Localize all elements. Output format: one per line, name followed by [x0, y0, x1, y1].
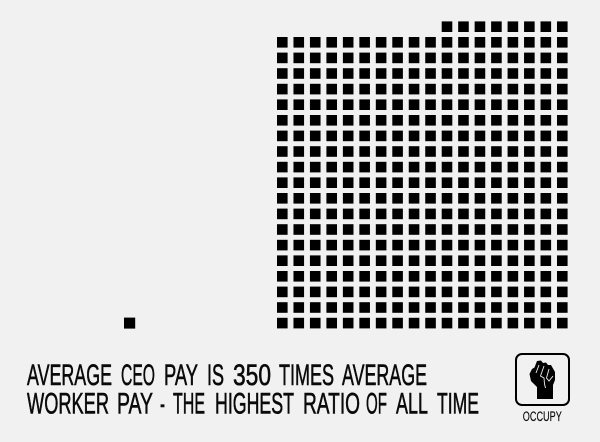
headline: -: [160, 388, 165, 421]
headline: [27, 359, 479, 421]
headline: WORKER: [27, 388, 109, 421]
headline: ALL: [396, 388, 428, 421]
headline: OF: [366, 388, 387, 421]
headline: 350: [233, 359, 271, 392]
headline: RATIO: [303, 388, 360, 421]
headline: IS: [207, 359, 224, 392]
square grid: CEO pay: [277, 21, 568, 328]
headline: CEO: [121, 359, 155, 392]
headline: AVERAGE: [342, 359, 427, 392]
headline: TIMES: [279, 359, 334, 392]
headline: HIGHEST: [215, 388, 294, 421]
headline: THE: [173, 388, 205, 421]
headline: AVERAGE: [27, 359, 112, 392]
icon: rounded frame: [516, 354, 569, 405]
single square: worker pay: [124, 318, 135, 329]
headline: PAY: [164, 359, 198, 392]
logo wordmark: OCCUPY: [523, 409, 562, 424]
headline: PAY: [117, 388, 153, 421]
headline: TIME: [437, 388, 479, 421]
icon: raised fist: [530, 360, 555, 399]
logo: Occupy fist: [516, 354, 569, 424]
